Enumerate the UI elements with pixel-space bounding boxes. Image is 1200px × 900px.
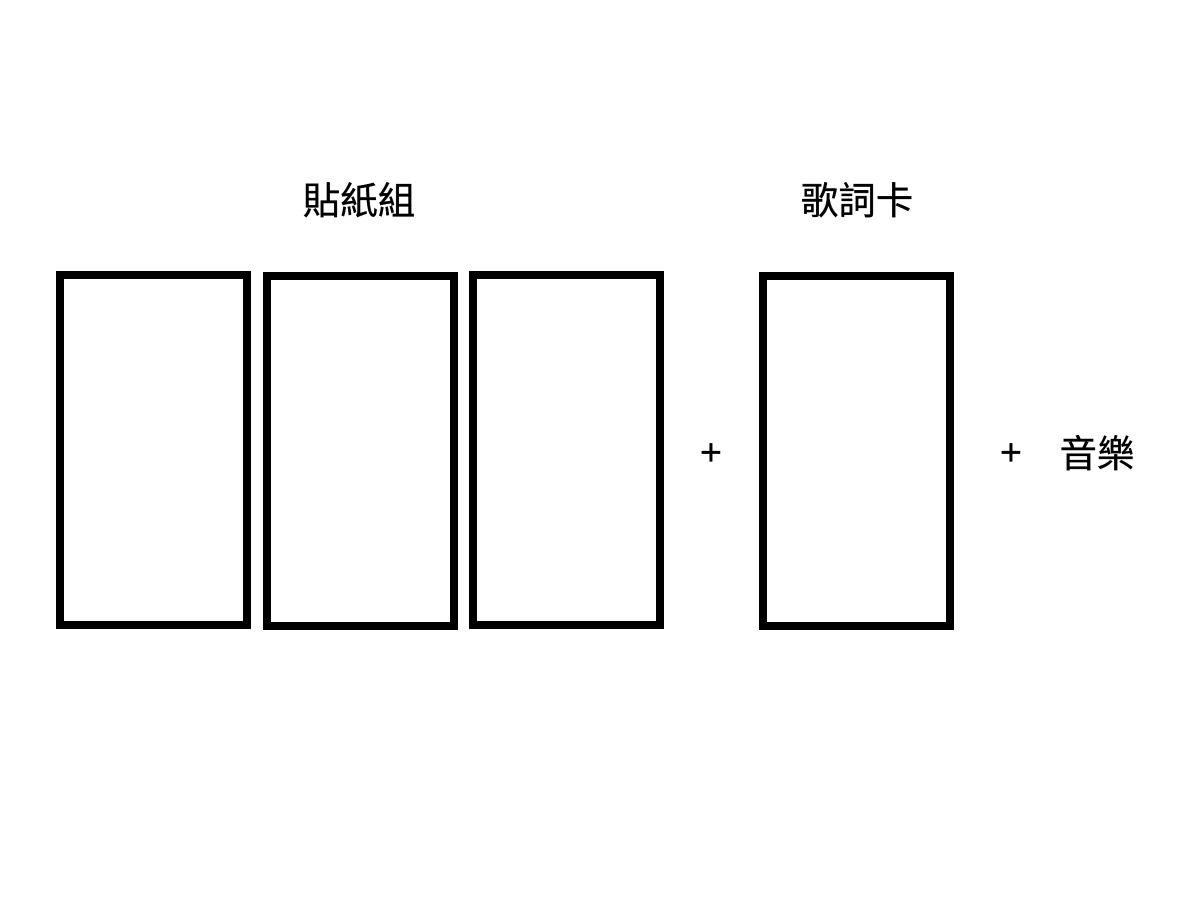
panel: sticker card 3 — [469, 271, 664, 629]
plus sign 1: + — [700, 431, 722, 473]
label: music: 音樂 — [1060, 433, 1134, 475]
panel: sticker card 1 — [56, 271, 251, 629]
plus sign 2: + — [1000, 431, 1022, 473]
panel: lyric card — [759, 272, 954, 630]
panel: sticker card 2 — [263, 272, 458, 630]
heading: lyric card: 歌詞卡 — [801, 180, 913, 222]
heading: sticker set: 貼紙組 — [303, 180, 415, 222]
